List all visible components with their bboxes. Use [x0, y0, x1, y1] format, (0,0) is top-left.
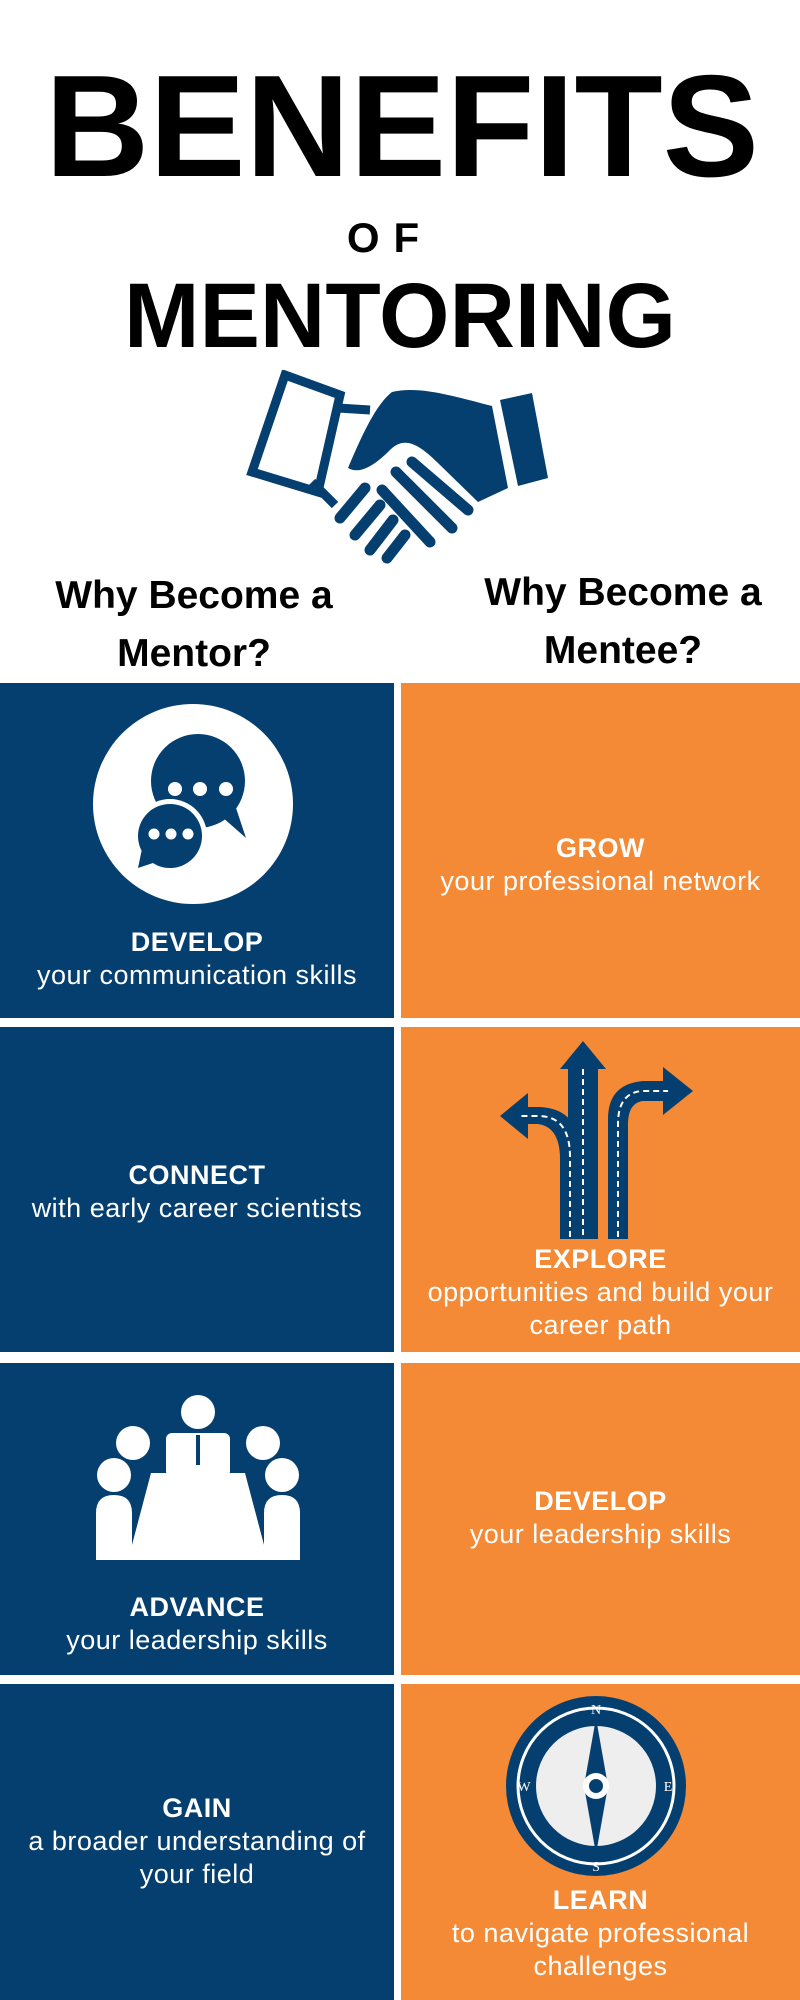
- icon: compass: S: [592, 1860, 600, 1875]
- text: develop: DEVELOP: [131, 927, 263, 957]
- heading: why mentee: [484, 571, 762, 672]
- panel: advance: [0, 1363, 394, 1675]
- text: grow: GROW: [556, 833, 645, 863]
- heading: why mentee: Mentee?: [544, 629, 702, 672]
- text: learn: challenges: [533, 1951, 668, 1981]
- text: explore: career path: [529, 1310, 672, 1340]
- text: gain: your field: [140, 1859, 254, 1889]
- text: learn: [452, 1885, 749, 1981]
- text: gain: a broader understanding of: [28, 1826, 366, 1856]
- heading: why mentee: Why Become a: [484, 571, 762, 614]
- text: connect: with early career scientists: [32, 1193, 362, 1223]
- icon: compass: W: [517, 1780, 531, 1795]
- panel: grow: [401, 683, 800, 1018]
- icon: compass: [506, 1696, 686, 1876]
- heading: why mentor: [55, 574, 333, 675]
- text: explore: EXPLORE: [534, 1244, 667, 1274]
- text: develop leadership: your leadership skills: [470, 1519, 731, 1549]
- panel: connect: [0, 1027, 394, 1352]
- panel: develop communication: [0, 683, 394, 1018]
- icon: compass: N: [591, 1703, 601, 1718]
- text: advance: ADVANCE: [129, 1592, 264, 1622]
- icon: handshake: [246, 370, 548, 564]
- icon: meeting table: [96, 1395, 300, 1560]
- text: grow: your professional network: [440, 866, 761, 896]
- text: connect: [32, 1160, 362, 1223]
- title: [45, 45, 759, 360]
- panel: gain: [0, 1684, 394, 2000]
- text: learn: LEARN: [553, 1885, 648, 1915]
- text: develop: [37, 927, 357, 990]
- panel: develop leadership: [401, 1363, 800, 1675]
- text: develop leadership: [470, 1486, 731, 1549]
- title: BENEFITS: [45, 45, 759, 207]
- text: connect: CONNECT: [128, 1160, 266, 1190]
- icon: road arrows: [500, 1041, 693, 1239]
- text: advance: your leadership skills: [66, 1625, 328, 1655]
- text: develop leadership: DEVELOP: [534, 1486, 667, 1516]
- heading: why mentor: Mentor?: [117, 632, 271, 675]
- text: develop: your communication skills: [37, 960, 357, 990]
- text: explore: [428, 1244, 773, 1340]
- text: advance: [66, 1592, 328, 1655]
- panel: explore: [401, 1027, 800, 1352]
- icon: compass: E: [664, 1780, 672, 1795]
- text: gain: [28, 1793, 366, 1889]
- text: learn: to navigate professional: [452, 1918, 749, 1948]
- text: gain: GAIN: [162, 1793, 232, 1823]
- title: OF: [347, 214, 433, 261]
- text: explore: opportunities and build your: [428, 1277, 773, 1307]
- panel: learn: [401, 1684, 800, 2000]
- text: grow: [440, 833, 761, 896]
- icon: chat bubbles: [93, 704, 293, 904]
- heading: why mentor: Why Become a: [55, 574, 333, 617]
